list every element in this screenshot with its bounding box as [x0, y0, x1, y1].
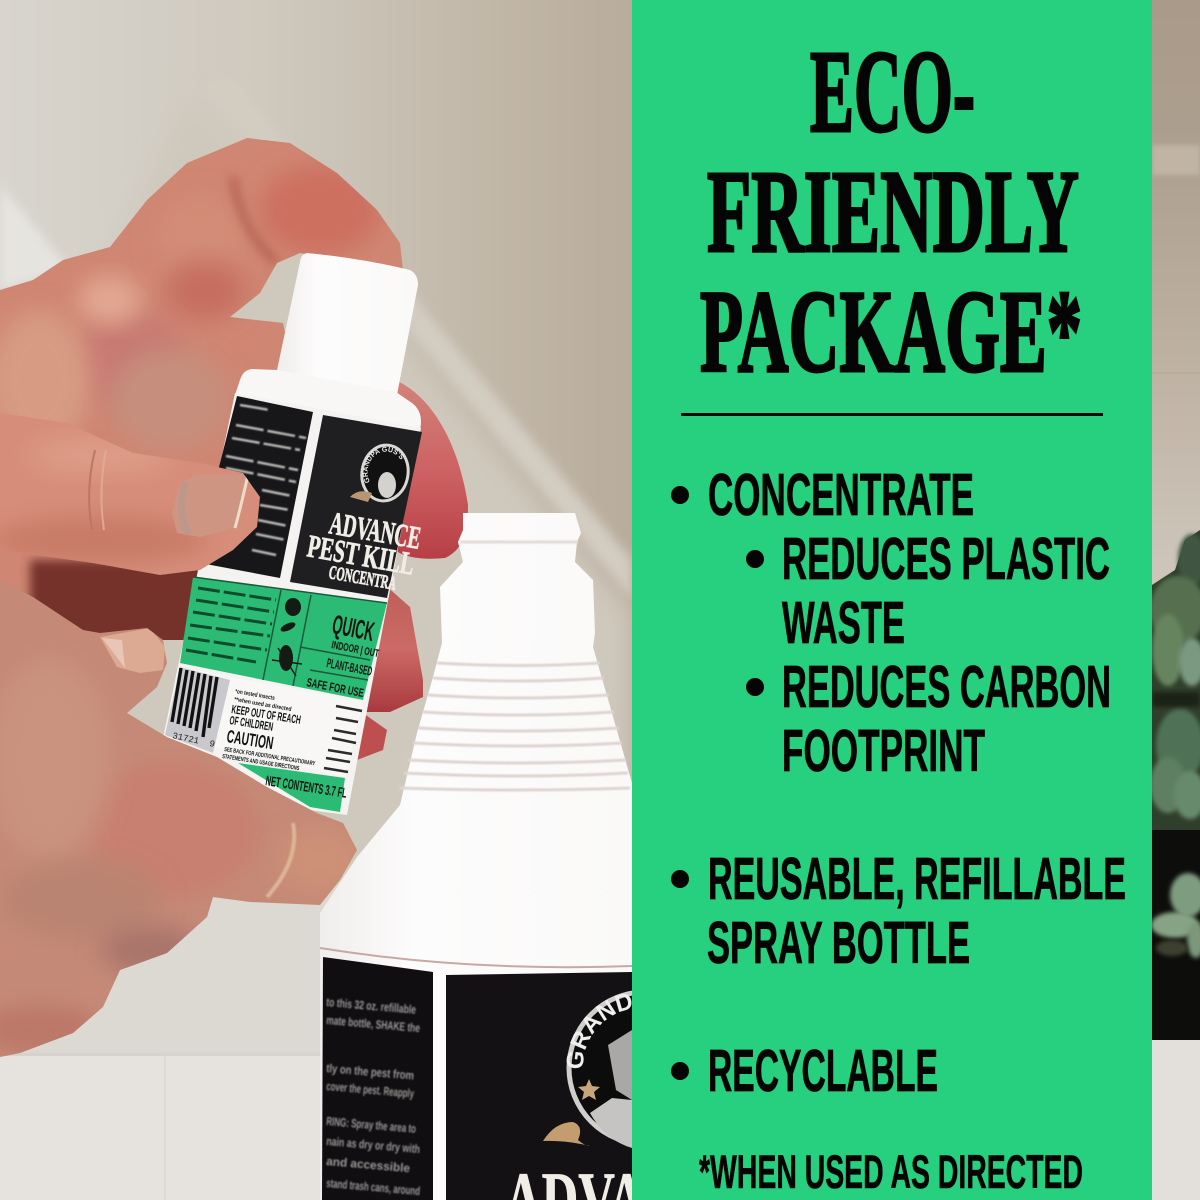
quick kill text: QUICK [330, 609, 377, 647]
sub-bullet: reduces carbon footprint [746, 654, 1111, 784]
body [163, 393, 421, 815]
net contents band [238, 763, 345, 812]
quick kill text [306, 615, 380, 698]
label: instructions text: RING: Spray the area to [326, 1114, 417, 1136]
bullet: reusable refillable spray bottle: SPRAY BOTTLE [707, 910, 970, 976]
panel: green eco-friendly [632, 0, 1152, 1200]
bullet: recyclable [671, 1038, 938, 1104]
bottle shoulder rim [320, 948, 632, 967]
title divider [681, 413, 1103, 416]
caution text: **when used as directed [234, 697, 292, 713]
first-aid text lines [186, 588, 276, 662]
active ingredients block [324, 706, 362, 772]
small bottle product name: PEST KILL [305, 527, 417, 582]
bullet: concentrate [671, 462, 974, 528]
small bottle: NET CONTENTS 3.7 FL [265, 772, 348, 801]
bullet: recyclable: RECYCLABLE [708, 1038, 938, 1104]
small bottle product name: CONCENTRA [327, 562, 398, 595]
sub-bullet: reduces carbon footprint: FOOTPRINT [782, 718, 985, 784]
instructions lines [226, 405, 306, 555]
quick kill text: PLANT-BASED [325, 655, 373, 679]
label: instructions text: to this 32 oz. refillable [326, 995, 417, 1017]
label: instructions text: nain as dry or dry with [326, 1134, 421, 1156]
thumbnail [172, 475, 248, 537]
logo badge small: GRANDPA GUS'S [363, 446, 404, 483]
bottle neck and shoulder [320, 513, 632, 1200]
bullet: reusable refillable spray bottle [671, 846, 1126, 976]
insect icons [272, 598, 302, 676]
hand: lower palm and thumb [0, 570, 370, 1070]
hand: fingers behind small bottle [357, 380, 468, 760]
barcode: 31721 9 [171, 731, 216, 750]
sub-bullet: reduces plastic waste [746, 526, 1110, 656]
small bottle [164, 253, 422, 815]
black panel right [290, 415, 422, 598]
green band divider lines [193, 577, 387, 686]
quick kill text: INDOOR | OUT [330, 639, 380, 660]
label: instructions text: cover the pest. Reapply [326, 1079, 415, 1101]
knuckle crease [267, 823, 294, 897]
caution text: STATEMENTS AND USAGE DIRECTIONS [222, 754, 300, 772]
hand: upper thumb [0, 414, 260, 575]
caution text [222, 689, 315, 772]
white caution panel [165, 667, 363, 777]
caution text: SEE BACK FOR ADDITIONAL PRECAUTIONARY [224, 747, 315, 767]
bullet: concentrate: CONCENTRATE [708, 462, 974, 528]
caution text: OF CHILDREN [229, 713, 274, 734]
label: instructions text: and accessible [326, 1154, 411, 1175]
label: instructions text: tly on the pest from [326, 1061, 415, 1083]
small bottle product name: ADVANCE [327, 504, 424, 556]
caution text: KEEP OUT OF REACH [231, 702, 302, 727]
logo badge small [350, 444, 410, 502]
black panel left [208, 396, 313, 578]
small bottle product name [306, 512, 421, 590]
shoulder [235, 369, 421, 430]
barcode [165, 667, 230, 753]
caution text: *on tested insects [235, 689, 276, 702]
quick kill text: SAFE FOR USE [305, 675, 365, 700]
cap [277, 253, 418, 395]
sub-bullet: reduces plastic waste: WASTE [782, 590, 905, 656]
label: right panel [446, 972, 632, 1200]
green band [180, 577, 387, 700]
logo badge [543, 990, 632, 1148]
label: instructions text: mate bottle, SHAKE the [326, 1013, 421, 1035]
photo: hands holding the two bottles [0, 138, 632, 1200]
label: instructions text [326, 995, 421, 1198]
hand: upper hand and index finger [0, 138, 403, 640]
bottle ribs [400, 542, 630, 790]
label: left panel [322, 957, 433, 1200]
fingertip nail [100, 628, 165, 673]
right strip of photo with plant [1150, 0, 1200, 1200]
title [700, 26, 1082, 397]
caution text: CAUTION [225, 726, 275, 753]
large bottle [320, 513, 632, 1200]
logo badge: GRAND [566, 994, 632, 1068]
title: ECO- [810, 26, 975, 157]
